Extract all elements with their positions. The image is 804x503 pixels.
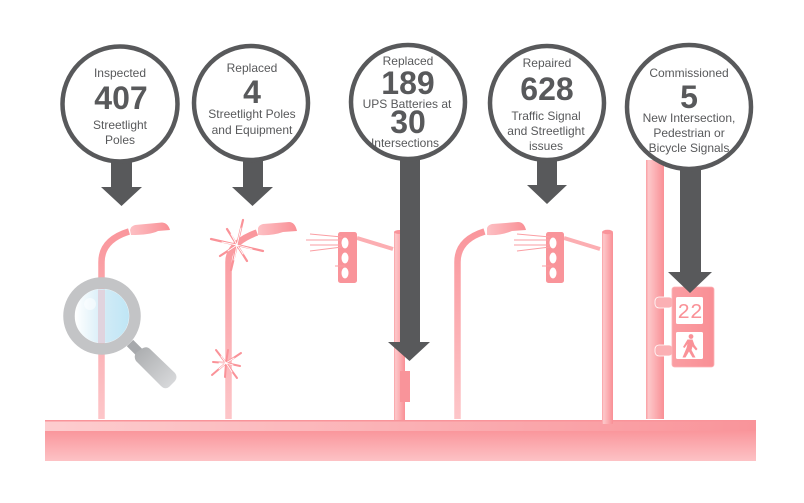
battery box [400,371,410,402]
countdown digits: 22 [677,302,703,325]
arrow 3 [388,160,430,361]
streetlight 1 [102,222,170,419]
pole [602,232,613,424]
badge: commissioned: New Intersection, [643,111,735,125]
arrow 1 [101,160,142,206]
badge: repaired: Repaired [523,56,571,70]
arrow 4 [527,160,567,204]
badge: inspected: Streetlight [93,118,148,132]
badge: replaced poles: Streetlight Poles [208,107,296,121]
badge: UPS batteries: Intersections [371,136,439,150]
badge: inspected: Inspected [94,66,146,80]
icon: lower spark [212,350,241,378]
streetlight and signal repair group [458,222,613,424]
badge: replaced poles [194,46,308,160]
ground band [45,420,756,461]
badge: commissioned: 5 [680,79,698,115]
arrow 2 [232,160,273,206]
badge: commissioned: Bicycle Signals [649,141,729,155]
badge: replaced poles: and Equipment [212,123,293,137]
badge: commissioned: Pedestrian or [653,126,725,140]
light rays [306,234,345,266]
icon: upper spark [211,220,263,270]
streetlight 2 with damage [211,220,297,419]
badge: replaced poles: 4 [243,74,261,110]
badge: UPS batteries: UPS Batteries at [363,97,452,111]
badge: replaced poles: Replaced [227,61,277,75]
badge: repaired: issues [529,139,563,153]
badge: UPS batteries [351,45,465,159]
pedestrian signal head [672,287,714,367]
badge: UPS batteries: 30 [390,104,426,140]
signal head [546,232,564,283]
badge: inspected: Poles [105,133,135,147]
badge: commissioned [627,45,751,169]
icon: walking person [682,334,698,358]
light rays [514,234,552,266]
badge: repaired: 628 [520,71,574,107]
pedestrian signal pole [646,160,714,419]
badge: inspected: 407 [94,80,148,116]
signal head [338,232,357,283]
badge: UPS batteries: 189 [381,65,435,101]
traffic signal 1 on pole [306,230,410,420]
arrow 5 [668,165,712,293]
magnifying glass icon [69,283,176,388]
badge: repaired: Traffic Signal [511,109,581,123]
badge: UPS batteries: Replaced [383,54,433,68]
badge: commissioned: Commissioned [649,66,729,80]
badge: repaired: and Streetlight [507,124,585,138]
badge: repaired [490,46,604,160]
badge: inspected [62,46,178,162]
